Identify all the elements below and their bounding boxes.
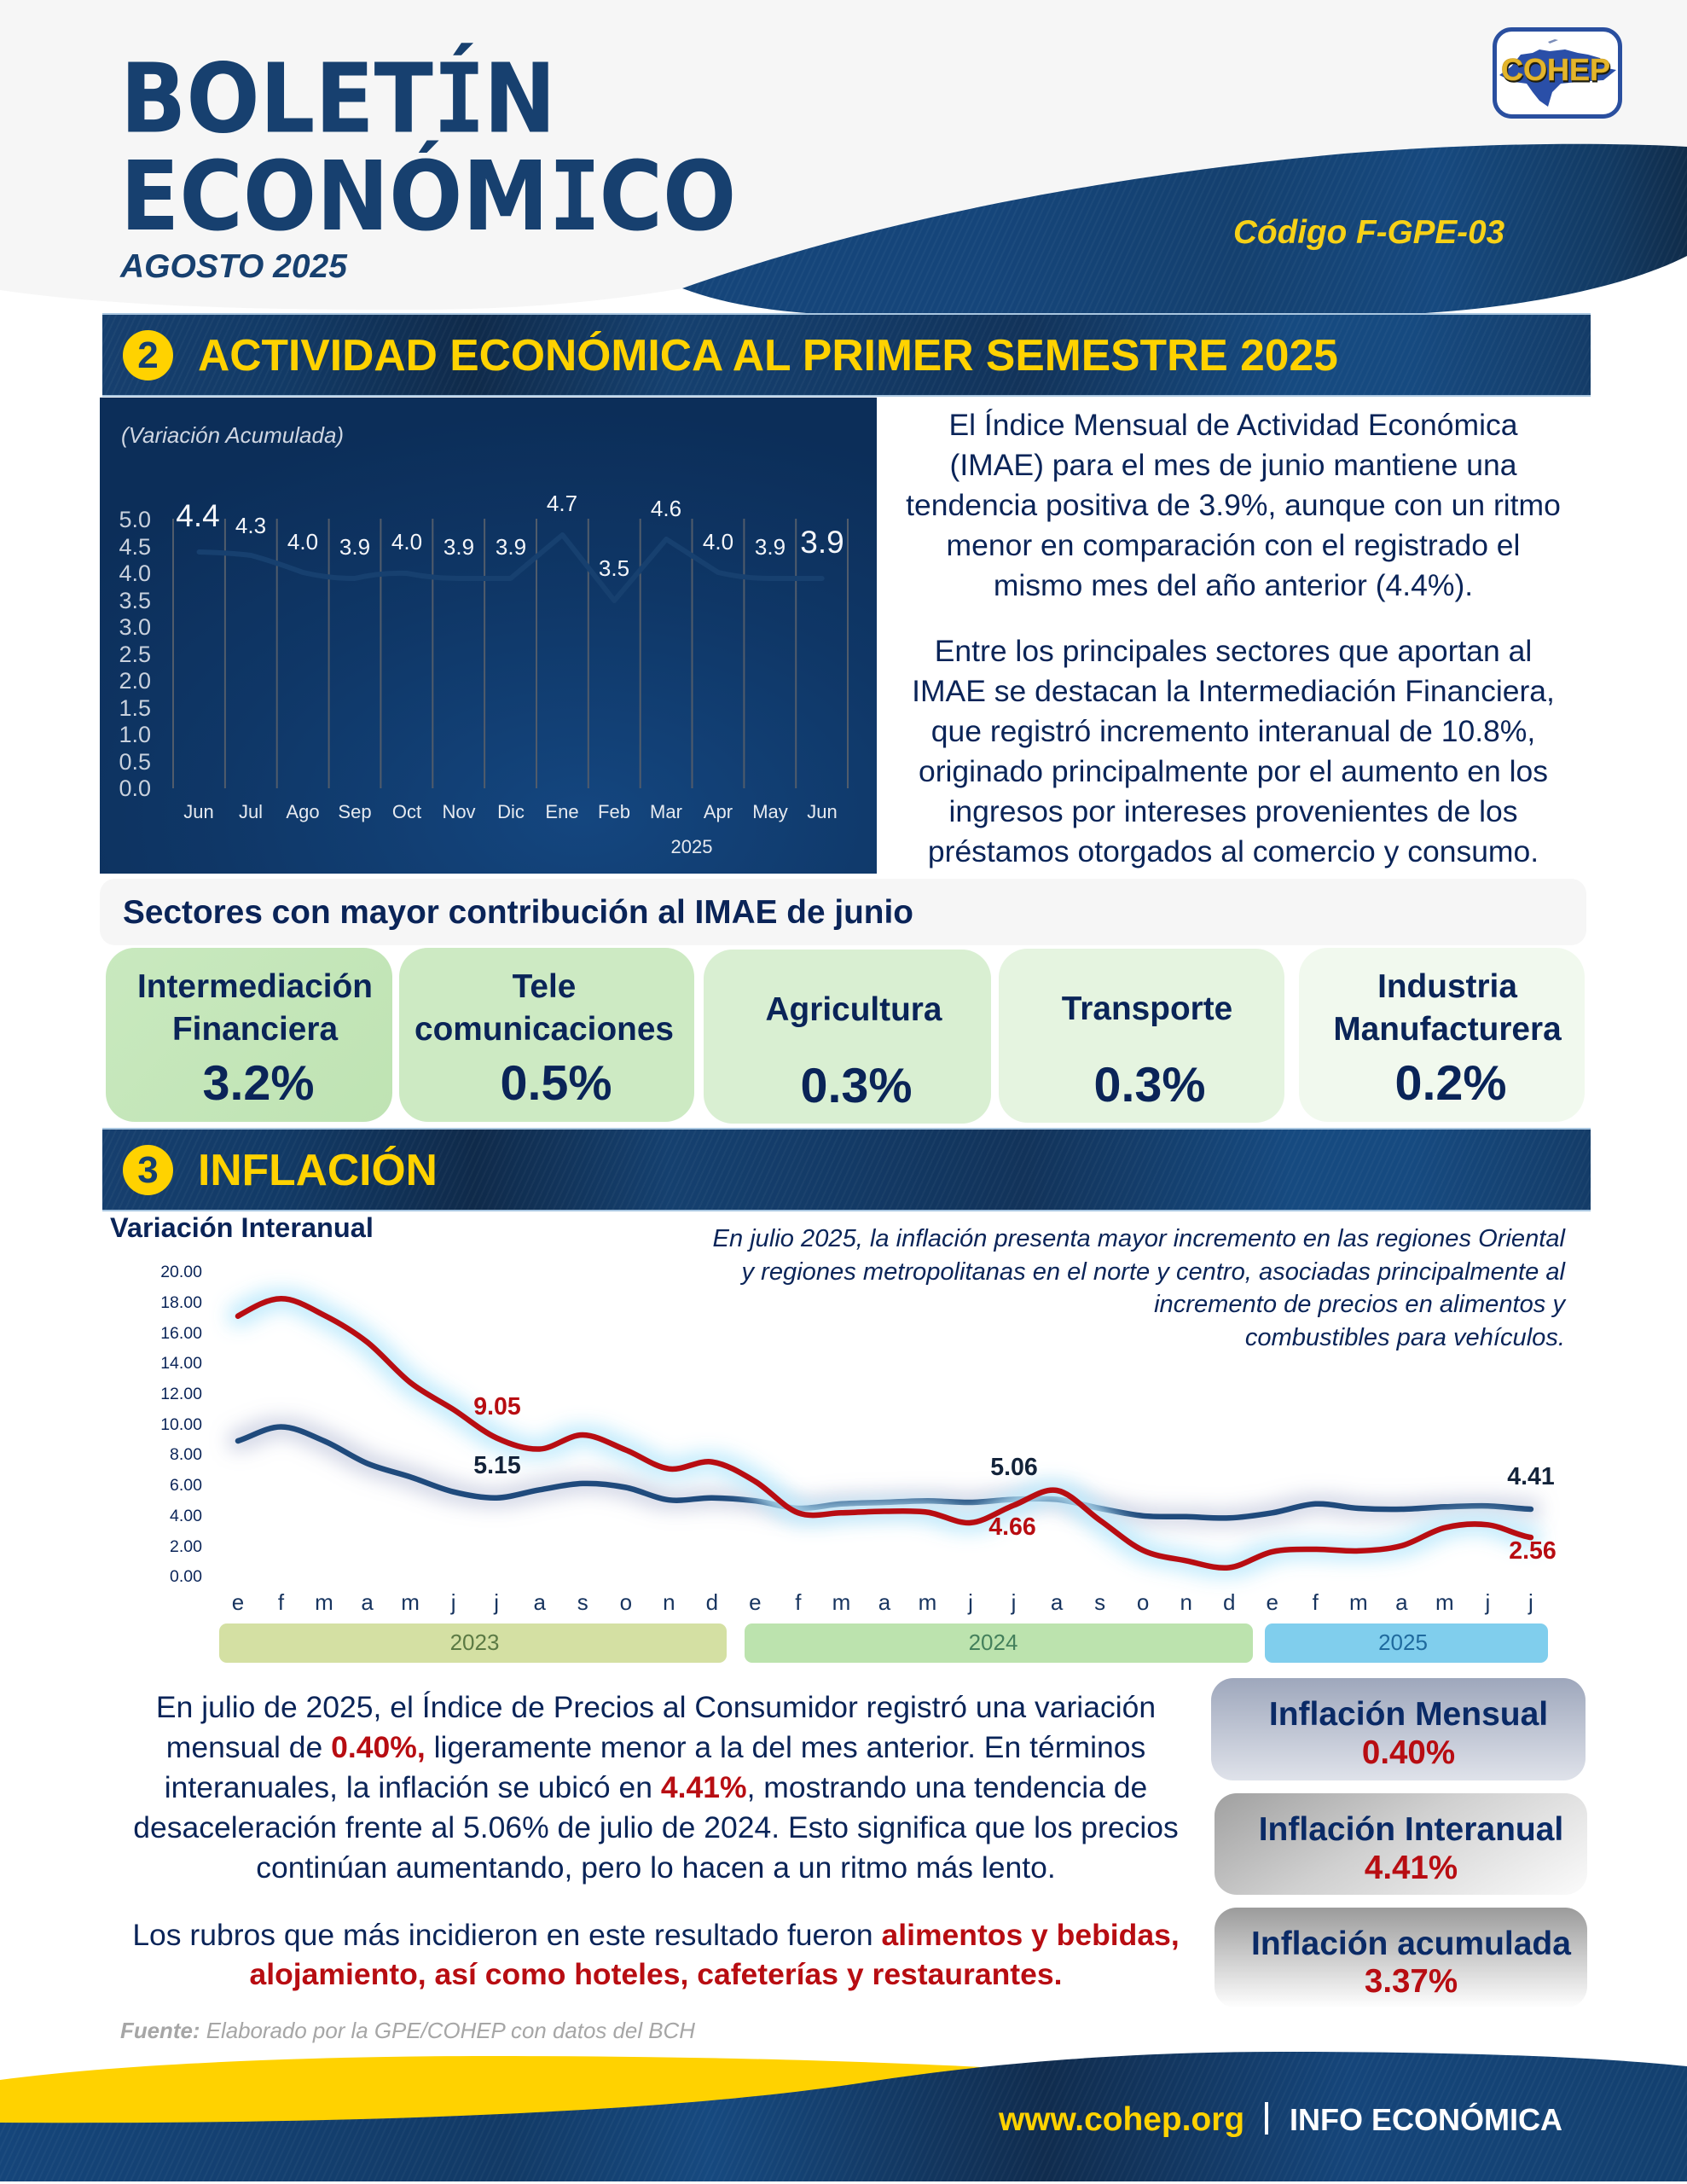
title: ECONÓMICO: [120, 140, 736, 252]
y axis labels: 4.0: [119, 561, 151, 586]
month labels: m: [1349, 1589, 1368, 1615]
year band 2023: 2023: [450, 1629, 499, 1655]
stat box: inflación mensual: [1211, 1678, 1586, 1780]
x axis labels: Oct: [392, 801, 421, 822]
card label: Industria: [1377, 968, 1517, 1005]
stat value: 0.40%: [1362, 1734, 1455, 1771]
y axis labels: 16.00: [160, 1324, 202, 1343]
section header: inflación: [102, 1128, 1591, 1211]
month labels: s: [577, 1589, 588, 1615]
month labels: e: [232, 1589, 244, 1615]
section header: actividad económica: [102, 313, 1591, 397]
series: blue line: [238, 1426, 1531, 1518]
data labels: 3.9: [800, 525, 844, 560]
y axis labels: 0.5: [119, 749, 151, 775]
text block: inflation summary: [133, 1690, 1179, 1885]
card label: [1333, 968, 1562, 1048]
data labels: 9.05: [473, 1393, 521, 1420]
title: BOLETÍN: [120, 43, 556, 154]
data labels: 3.9: [755, 534, 786, 560]
x axis labels: Mar: [650, 801, 682, 822]
data labels: 4.0: [703, 529, 733, 555]
y axis labels: 14.00: [160, 1354, 202, 1373]
stat box: inflación interanual: [1215, 1793, 1587, 1895]
text block: IMAE description: El Índice Mensual de Actividad Económica: [948, 408, 1517, 442]
card: Intermediación Financiera: [106, 948, 392, 1122]
month labels: j: [967, 1589, 973, 1615]
text block: inflation summary: desaceleración frente al 5.06% de julio de 2024. Esto significa que los precios: [133, 1810, 1179, 1844]
data labels: 4.3: [235, 513, 266, 538]
year band 2025: [1265, 1623, 1548, 1663]
text block: sectors description: Entre los principales sectores que aportan al: [935, 634, 1532, 668]
month labels: a: [533, 1589, 546, 1615]
card label: comunicaciones: [415, 1011, 674, 1048]
month labels: m: [401, 1589, 420, 1615]
month labels: e: [749, 1589, 762, 1615]
text block: IMAE description: mismo mes del año anterior (4.4%).: [994, 568, 1473, 602]
month labels: s: [1094, 1589, 1105, 1615]
x axis labels: [183, 801, 838, 857]
data labels: 3.9: [443, 534, 474, 560]
text block: main items: alojamiento, así como hoteles, cafeterías y restaurantes.: [249, 1957, 1062, 1991]
text block: IMAE description: menor en comparación con el registrado el: [947, 528, 1520, 562]
month labels: a: [1395, 1589, 1408, 1615]
data labels: 4.4: [176, 498, 220, 533]
stat value: 4.41%: [1365, 1850, 1458, 1886]
month labels: a: [361, 1589, 374, 1615]
data labels: 5.06: [990, 1454, 1038, 1481]
section number 3: [123, 1145, 173, 1195]
text block: inflation summary: continúan aumentando, pero lo hacen a un ritmo más lento.: [256, 1850, 1056, 1885]
x axis labels: Apr: [704, 801, 733, 822]
month labels: a: [1051, 1589, 1064, 1615]
card: Telecomunicaciones: [399, 948, 694, 1122]
y axis labels: 18.00: [160, 1293, 202, 1312]
month labels: f: [1313, 1589, 1319, 1615]
data labels: 4.7: [547, 491, 577, 516]
stat value: 3.37%: [1365, 1963, 1458, 2000]
month labels: d: [706, 1589, 718, 1615]
x axis labels: Feb: [598, 801, 630, 822]
card value: 0.3%: [1093, 1058, 1206, 1112]
date: AGOSTO 2025: [120, 248, 347, 285]
data labels: 4.0: [391, 529, 422, 555]
y axis labels: 2.00: [170, 1537, 202, 1556]
text block: inflation note: En julio 2025, la inflación presenta mayor incremento en las regiones Oriental: [713, 1225, 1565, 1252]
month labels: j: [493, 1589, 499, 1615]
stat title: Inflación Interanual: [1259, 1811, 1563, 1848]
card value: 0.5%: [500, 1056, 612, 1111]
section number 2: 2: [137, 334, 159, 376]
y axis labels: 20.00: [160, 1263, 202, 1281]
card value: 0.2%: [1394, 1056, 1507, 1111]
stat title: Inflación Mensual: [1269, 1696, 1548, 1733]
section number 3: 3: [137, 1149, 159, 1191]
y axis labels: 12.00: [160, 1385, 202, 1403]
y axis labels: 4.5: [119, 534, 151, 560]
source note: Fuente: Elaborado por la GPE/COHEP con datos del BCH: [120, 2019, 695, 2043]
card label: [415, 968, 674, 1048]
section number 2: [123, 330, 173, 380]
x axis labels: Ene: [545, 801, 579, 822]
y axis labels: 4.00: [170, 1507, 202, 1525]
x axis labels: Jun: [183, 801, 214, 822]
text block: IMAE description: [906, 408, 1561, 602]
text block: main items: Los rubros que más incidieron en este resultado fueron alimentos y bebidas,: [132, 1918, 1180, 1952]
month labels: [232, 1589, 1533, 1615]
month labels: m: [919, 1589, 936, 1615]
year band 2024: [745, 1623, 1253, 1663]
card label: Tele: [513, 968, 576, 1005]
year band 2024: 2024: [969, 1629, 1017, 1655]
data labels: 3.5: [599, 555, 629, 581]
y axis labels: 1.0: [119, 722, 151, 747]
chart heading: Variación Interanual: [110, 1212, 374, 1243]
y axis labels: 1.5: [119, 695, 151, 721]
title: [120, 43, 736, 252]
data labels: 2.56: [1509, 1537, 1557, 1565]
month labels: m: [1435, 1589, 1454, 1615]
month labels: n: [1180, 1589, 1192, 1615]
month labels: j: [450, 1589, 456, 1615]
text block: sectors description: préstamos otorgados al comercio y consumo.: [928, 834, 1539, 868]
chart subtitle: (Variación Acumulada): [121, 422, 344, 448]
x axis labels: Jul: [239, 801, 263, 822]
y axis labels: 0.00: [170, 1567, 202, 1586]
stat box: inflación acumulada: [1215, 1908, 1587, 2008]
month labels: f: [278, 1589, 285, 1615]
data labels: 4.0: [287, 529, 318, 555]
month labels: o: [620, 1589, 632, 1615]
month labels: j: [1485, 1589, 1490, 1615]
card label: Transporte: [1062, 990, 1232, 1027]
month labels: j: [1528, 1589, 1533, 1615]
year band 2025: 2025: [1378, 1629, 1428, 1655]
y axis labels: [160, 1263, 202, 1586]
year band 2023: [219, 1623, 727, 1663]
month labels: m: [315, 1589, 333, 1615]
month labels: n: [663, 1589, 675, 1615]
text block: sectors description: ingresos por intereses provenientes de los: [948, 794, 1518, 828]
text block: sectors description: originado principalmente por el aumento en los: [919, 754, 1548, 788]
x axis labels: May: [752, 801, 788, 822]
panel: sectors heading: [100, 879, 1586, 945]
card value: 3.2%: [202, 1056, 315, 1111]
stat title: Inflación acumulada: [1251, 1926, 1571, 1962]
y axis labels: [119, 507, 151, 801]
card: Transporte: [999, 949, 1284, 1123]
card label: Manufacturera: [1333, 1011, 1562, 1048]
month labels: j: [1011, 1589, 1016, 1615]
y axis labels: 8.00: [170, 1445, 202, 1464]
card value: 0.3%: [800, 1059, 913, 1113]
card label: Agricultura: [766, 991, 942, 1028]
x axis labels: Nov: [442, 801, 476, 822]
y axis labels: 0.0: [119, 775, 151, 801]
data labels: 5.15: [473, 1452, 521, 1479]
icon: COHEP logo: COHEP: [1502, 54, 1611, 89]
text block: sectors description: que registró incremento interanual de 10.8%,: [931, 714, 1535, 748]
text block: IMAE description: (IMAE) para el mes de junio mantiene una: [950, 448, 1516, 482]
y axis labels: 3.5: [119, 588, 151, 613]
card label: Financiera: [172, 1011, 338, 1048]
text block: sectors description: [912, 634, 1555, 868]
text block: inflation note: incremento de precios en alimentos y: [1154, 1291, 1565, 1318]
text block: IMAE description: tendencia positiva de 3.9%, aunque con un ritmo: [906, 488, 1561, 522]
text block: main items: [102, 1915, 1209, 1994]
panel: IMAE chart: [100, 398, 877, 874]
card label: [137, 968, 373, 1048]
data labels: 4.41: [1507, 1463, 1555, 1490]
footer separator: [1265, 2102, 1268, 2135]
text block: inflation note: y regiones metropolitanas en el norte y centro, asociadas principalmente al: [742, 1258, 1565, 1286]
y axis labels: 6.00: [170, 1476, 202, 1495]
icon: COHEP logo: COHEP: [1501, 52, 1610, 87]
line chart: inflation: [160, 1263, 1557, 1615]
text block: inflation note: combustibles para vehículos.: [1245, 1324, 1565, 1351]
month labels: o: [1137, 1589, 1149, 1615]
x axis labels: Dic: [497, 801, 525, 822]
card label: Intermediación: [137, 968, 373, 1005]
card: Agricultura: [704, 950, 991, 1124]
series: red line: [238, 1298, 1531, 1568]
section heading: INFLACIÓN: [198, 1145, 438, 1194]
section heading: ACTIVIDAD ECONÓMICA AL PRIMER SEMESTRE 2025: [198, 330, 1338, 380]
y axis labels: 2.0: [119, 668, 151, 694]
text block: inflation summary: En julio de 2025, el Índice de Precios al Consumidor registró una variación: [156, 1690, 1156, 1724]
month labels: m: [832, 1589, 850, 1615]
x axis labels: Sep: [338, 801, 372, 822]
y axis labels: 3.0: [119, 614, 151, 640]
footer label: INFO ECONÓMICA: [1290, 2102, 1562, 2137]
data labels: 3.9: [339, 534, 370, 560]
icon: COHEP logo: [1493, 27, 1622, 119]
footer website: www.cohep.org: [999, 2101, 1244, 2138]
text block: inflation summary: interanuales, la inflación se ubicó en 4.41%, mostrando una tendencia de: [165, 1770, 1147, 1804]
month labels: d: [1223, 1589, 1235, 1615]
text block: inflation note: [713, 1225, 1566, 1351]
y axis labels: 2.5: [119, 642, 151, 667]
text block: inflation summary: mensual de 0.40%, ligeramente menor a la del mes anterior. En términos: [166, 1730, 1145, 1764]
data labels: [176, 491, 844, 581]
x axis labels: Jun: [807, 801, 838, 822]
data labels: 4.66: [988, 1513, 1036, 1541]
text block: sectors description: IMAE se destacan la Intermediación Financiera,: [912, 674, 1555, 708]
document code: Código F-GPE-03: [1233, 214, 1504, 251]
month labels: f: [795, 1589, 802, 1615]
data labels: [473, 1393, 1557, 1565]
x axis labels: Ago: [286, 801, 320, 822]
line series: [200, 535, 822, 601]
x axis labels: 2025: [671, 836, 712, 857]
data labels: 4.6: [651, 496, 681, 521]
panel: sectors heading: Sectores con mayor contribución al IMAE de junio: [123, 894, 913, 931]
y axis labels: 5.0: [119, 507, 151, 532]
card: Industria Manufacturera: [1299, 948, 1585, 1122]
data labels: 3.9: [496, 534, 526, 560]
y axis labels: 10.00: [160, 1415, 202, 1434]
month labels: a: [878, 1589, 891, 1615]
month labels: e: [1266, 1589, 1278, 1615]
